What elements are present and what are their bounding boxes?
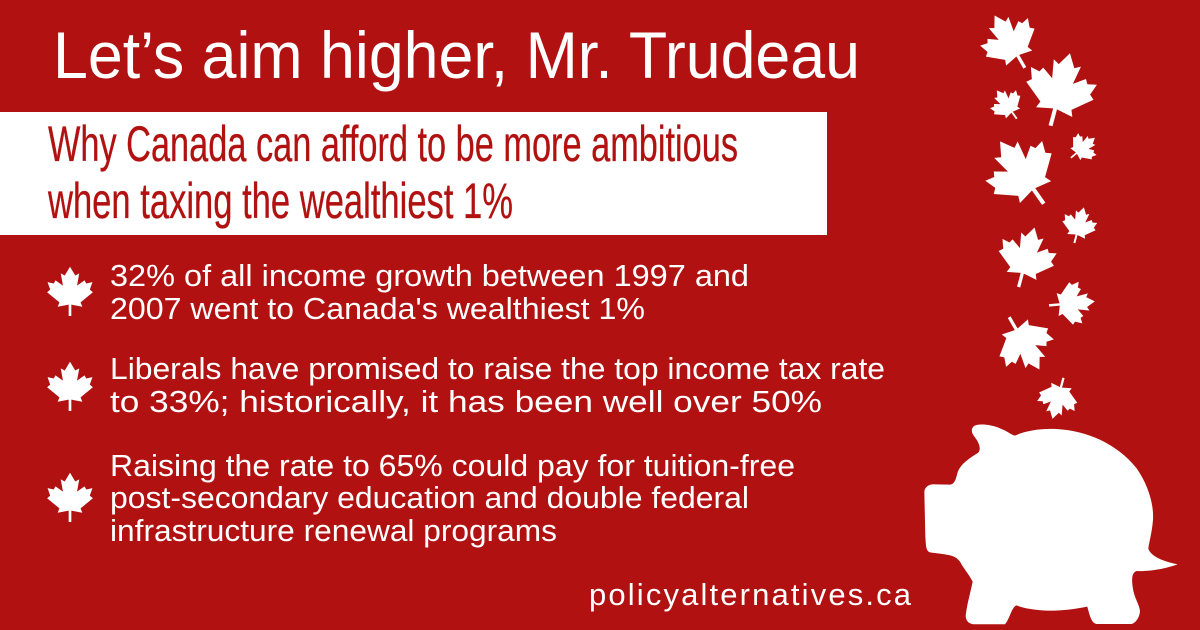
bullet 1: 2007 went to Canada's wealthiest 1% — [110, 291, 645, 326]
bullet 2: Liberals have promised to raise the top income tax rate — [110, 351, 885, 386]
subtitle banner: when taxing the wealthiest 1% — [47, 173, 513, 229]
bullet 3: post-secondary education and double federal — [110, 480, 749, 515]
bullet 3: infrastructure renewal programs — [110, 513, 557, 548]
subtitle banner — [0, 112, 827, 235]
bullet 1: 32% of all income growth between 1997 and — [110, 258, 749, 293]
falling maple leaves — [970, 1, 1104, 424]
bullet 3: Raising the rate to 65% could pay for tuition-free — [110, 448, 795, 483]
website url: policyalternatives.ca — [589, 577, 912, 612]
title: Let’s aim higher, Mr. Trudeau — [53, 18, 860, 92]
bullet 2 — [47, 351, 885, 419]
piggy bank — [924, 425, 1178, 624]
bullet 3 — [47, 448, 795, 548]
subtitle banner: Why Canada can afford to be more ambitious — [48, 116, 738, 172]
bullet 1 — [47, 258, 749, 326]
bullet 2: to 33%; historically, it has been well over 50% — [110, 384, 822, 419]
